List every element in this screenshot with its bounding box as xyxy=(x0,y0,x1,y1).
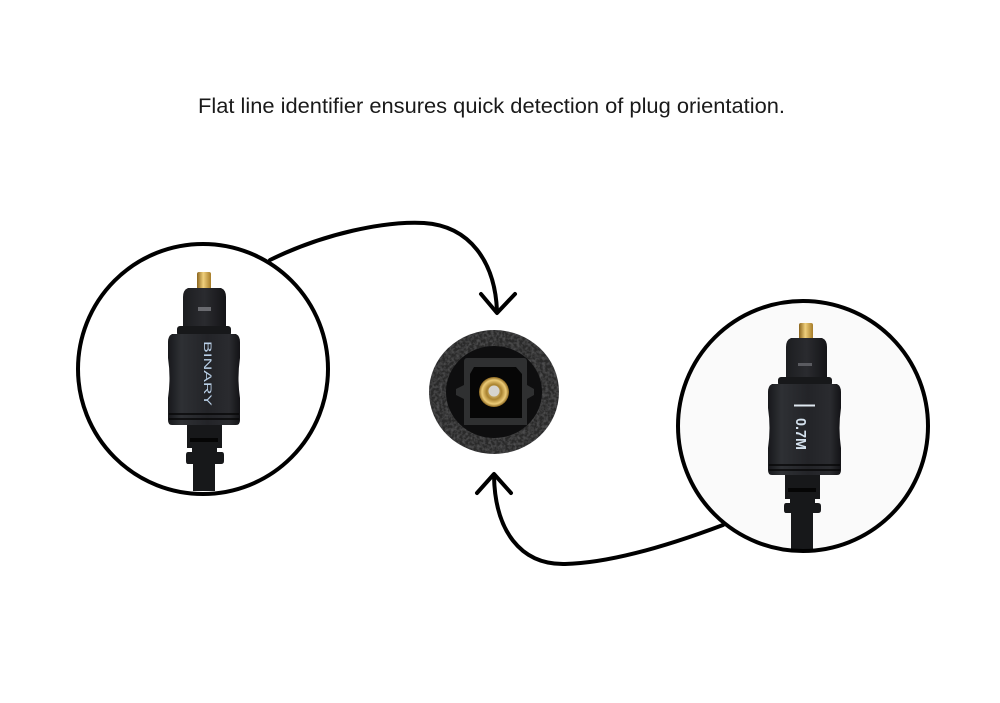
length text: 0.7M xyxy=(792,418,809,450)
length mark xyxy=(794,404,815,406)
logo text: BINARY xyxy=(201,341,213,407)
neck groove xyxy=(190,438,218,442)
plug head xyxy=(786,338,827,379)
right circle: plug with 0.7M marking xyxy=(678,301,928,551)
neck groove xyxy=(788,488,816,492)
body grooves xyxy=(769,465,840,470)
arrow: top curve from left circle to centre plug xyxy=(270,223,515,313)
plug body xyxy=(768,384,841,475)
plug head xyxy=(183,288,226,328)
flat line identifier xyxy=(798,363,812,366)
flat line identifier xyxy=(198,307,211,311)
gold ferrule xyxy=(479,377,509,407)
gold pin xyxy=(197,272,211,290)
gold pin xyxy=(799,323,813,340)
fibre core xyxy=(488,386,500,396)
connector opening xyxy=(470,367,522,418)
connector square xyxy=(456,358,534,425)
neck and strain relief xyxy=(186,425,224,491)
collar xyxy=(778,377,832,386)
arrow: bottom curve from right circle to centre plug xyxy=(477,474,723,564)
collar xyxy=(177,326,231,336)
left circle: plug with BINARY logo xyxy=(78,244,328,494)
plug body xyxy=(168,334,240,425)
title: Flat line identifier ensures quick detection of plug orientation. xyxy=(198,95,785,118)
neck and strain relief xyxy=(784,475,821,550)
body grooves xyxy=(169,414,239,419)
centre plug: end-on view xyxy=(429,330,559,454)
